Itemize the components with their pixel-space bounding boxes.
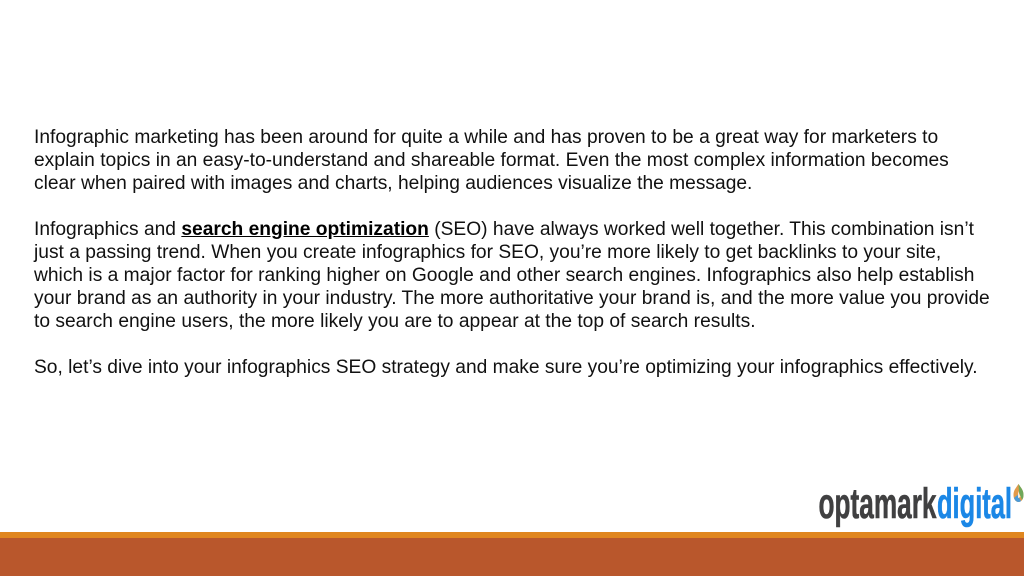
text block: intro paragraph: Infographic marketing has been around for quite a while and has proven to be a great way for marketers to	[34, 127, 938, 148]
text block: SEO paragraph	[34, 219, 990, 332]
footer: orange accent bar	[0, 532, 1024, 538]
text block: SEO paragraph: to search engine users, the more likely you are to appear at the top of search results.	[34, 311, 756, 332]
text block: SEO paragraph: Infographics and search engine optimization (SEO) have always worked well together. This combination isn’t	[34, 219, 974, 240]
text block: intro paragraph: clear when paired with images and charts, helping audiences visualize the message.	[34, 173, 752, 194]
footer: rust band	[0, 538, 1024, 576]
text block: SEO paragraph: which is a major factor for ranking higher on Google and other search engines. Infographics also help establish	[34, 265, 974, 286]
logo: optamarkdigital: optamark	[818, 480, 937, 528]
text block: closing paragraph: So, let’s dive into your infographics SEO strategy and make sure you’re optimizing your infographics effectively.	[34, 357, 978, 378]
text block: intro paragraph: explain topics in an easy-to-understand and shareable format. Even the most complex information becomes	[34, 150, 949, 171]
text block: SEO paragraph: your brand as an authority in your industry. The more authoritative your brand is, and the more value you provide	[34, 288, 990, 309]
text block: intro paragraph	[34, 127, 949, 194]
text block: SEO paragraph: just a passing trend. When you create infographics for SEO, you’re more likely to get backlinks to your site,	[34, 242, 941, 263]
